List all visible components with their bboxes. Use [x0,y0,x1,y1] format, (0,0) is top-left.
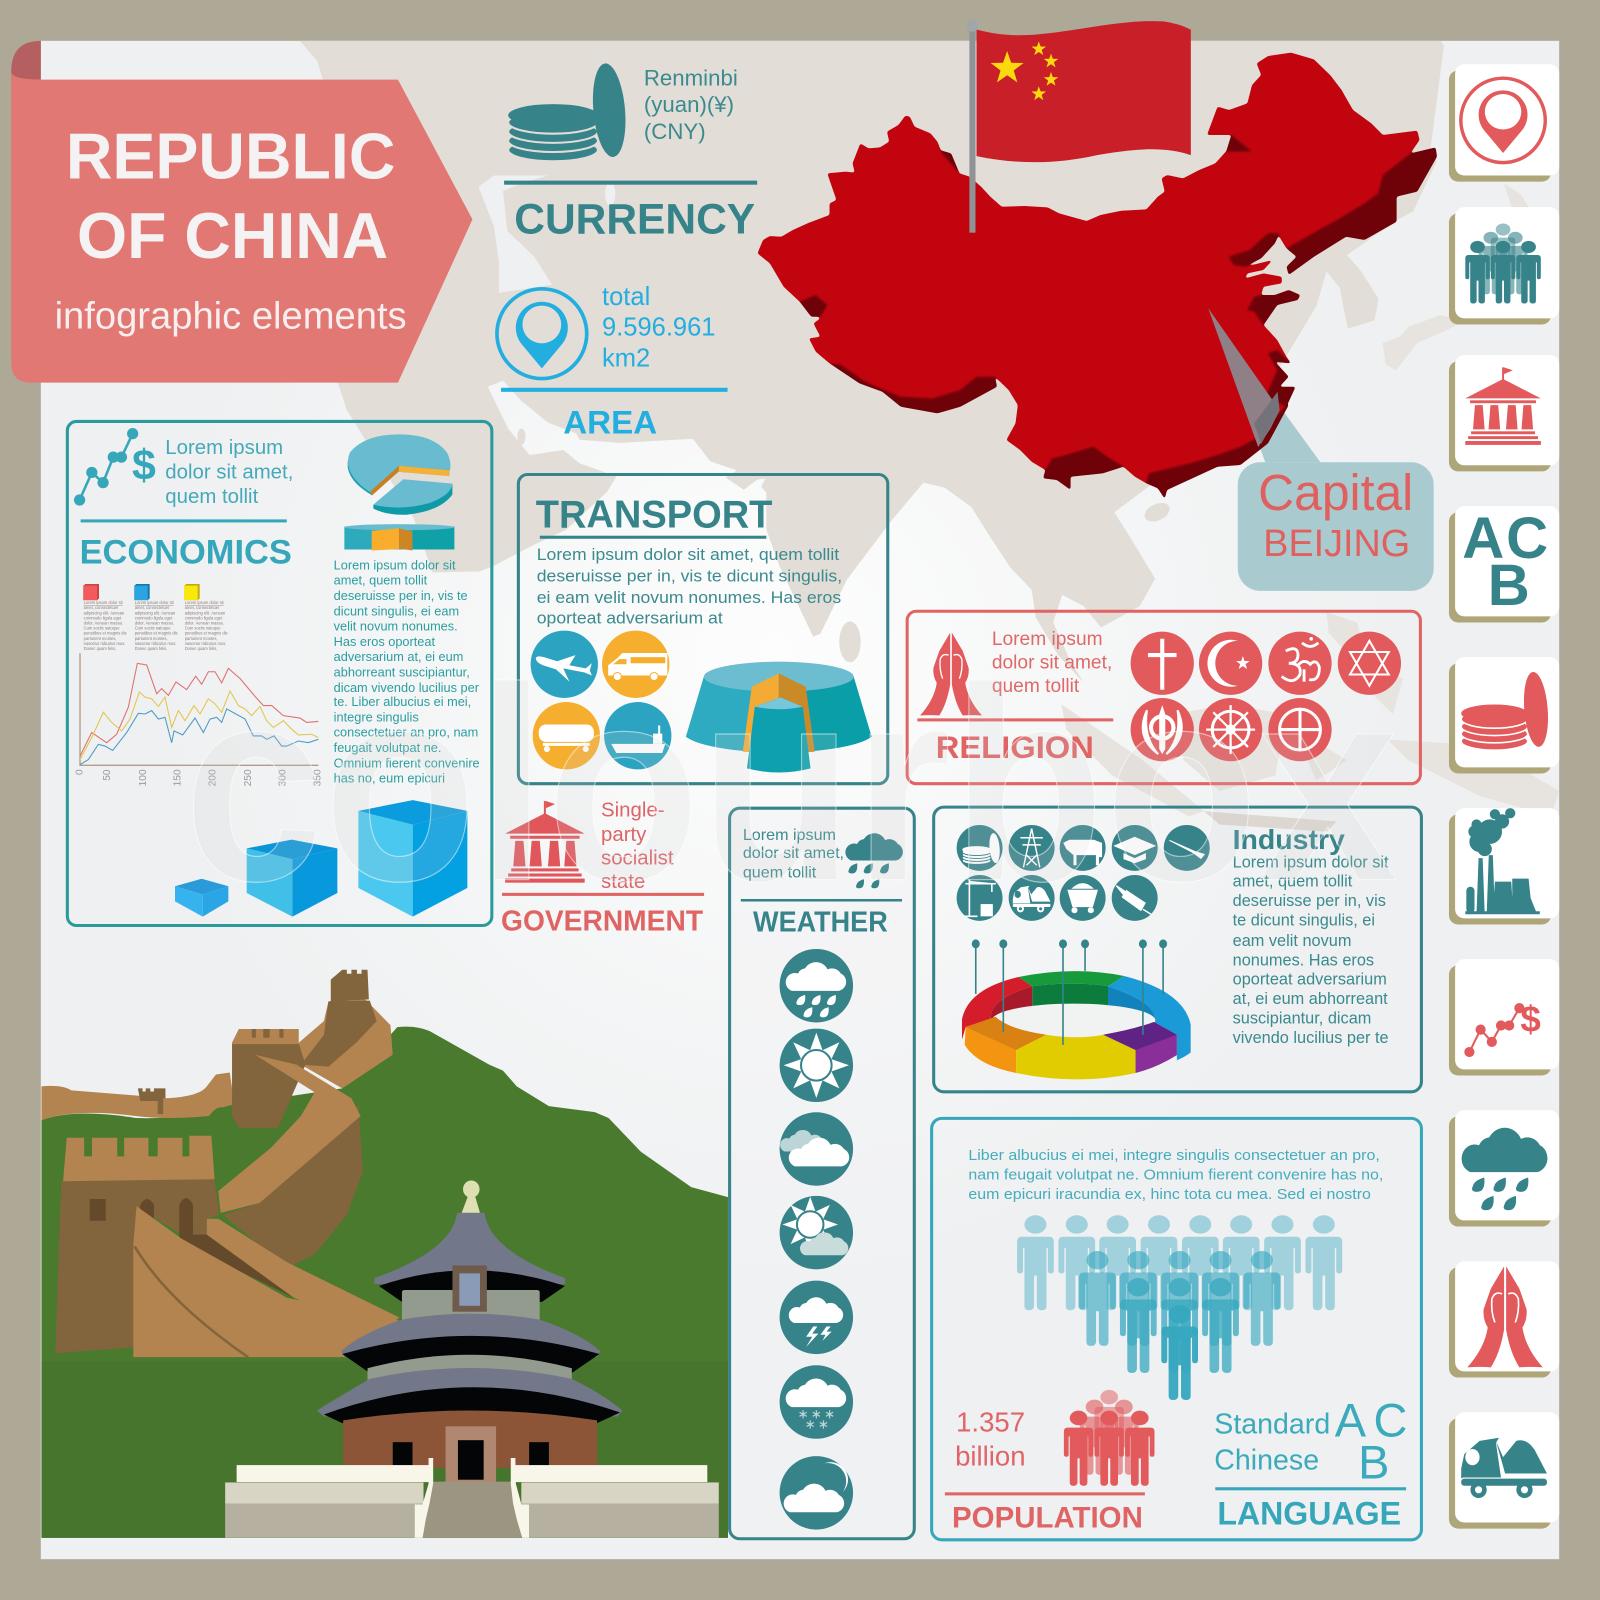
industry paragraph: deseruisse per in, vis [1233,892,1386,910]
sidebar icon tiles [1449,64,1559,1529]
language letters: B [1358,1437,1389,1489]
currency text: (yuan)(¥) [644,92,734,117]
panel: weather [730,808,914,1539]
flag stars [991,41,1058,100]
map of China [757,53,1437,499]
icon: thunderstorm [780,1281,853,1354]
industry paragraph: Lorem ipsum dolor sit [1233,853,1389,871]
panel: economics [67,421,492,926]
tile: religion [1449,1261,1559,1378]
people chart [1017,1215,1342,1400]
icon: night cloud [780,1456,853,1530]
icon: om [1268,632,1332,695]
icon: graduation cap [1112,825,1158,871]
tile: weather [1449,1110,1559,1227]
legend captions: penatibus et magnis dis [135,631,178,636]
population figure: billion [955,1440,1026,1471]
icon: coins [508,62,629,161]
economics paragraph: Lorem ipsum dolor sit [334,557,456,572]
mid tower [232,1029,306,1128]
icon: location pin [497,289,587,379]
inland seas [479,176,615,293]
far wall [41,1073,234,1120]
economics paragraph: abhorreant suscipiantur, [334,665,470,680]
weather intro text: quem tollit [743,864,817,882]
tile: government [1449,355,1559,471]
economics paragraph: has no, eum epicuri [334,771,445,786]
watermark: colourbox [184,632,1400,939]
legend captions: adipiscing elit. Aenean [84,610,124,615]
economics paragraph: dicunt singulis, ei eam [334,603,459,618]
icon: ship [604,702,671,769]
industry paragraph: te dicunt singulis, ei [1233,912,1375,930]
top tower [331,970,369,1011]
legend captions: dolor. Aenean massa. [185,620,224,625]
weather intro text: dolor sit amet, [743,844,844,862]
economics paragraph: amet, quem tollit [334,573,428,588]
icon: coins [957,825,1003,871]
tile: population [1449,207,1559,324]
legend captions: amet, consectetuer [185,605,220,610]
legend captions: parturient montes, [84,636,117,641]
flag pole [969,24,976,233]
currency heading: CURRENCY [514,196,755,244]
legend captions: parturient montes, [185,636,218,641]
legend captions: Lorem ipsum dolor sit [84,600,124,605]
transport paragraph: deseruisse per in, vis te dicunt singulis, [537,566,842,586]
industry paragraph: suscipiantur, dicam [1233,1009,1371,1027]
transport heading: TRANSPORT [536,494,773,537]
government text: Single- [601,799,665,821]
ring chart [962,940,1191,1079]
industry heading: Industry [1233,824,1346,855]
chart axis labels [75,769,323,786]
industry paragraph: nonumes. Has eros [1233,951,1374,969]
icon: rain cloud [845,833,903,888]
area block [497,283,728,441]
title: REPUBLIC [66,120,395,193]
title banner [11,41,472,383]
banner fold [11,41,41,80]
legend captions: Donec quam felis, [185,646,217,651]
legend captions: amet, consectetuer [135,605,170,610]
callout box [1238,462,1434,591]
industry paragraph: amet, quem tollit [1233,873,1353,891]
economics paragraph: Omnium fierent convenire [334,755,480,770]
capital name: BEIJING [1263,522,1410,564]
tile: economics: $ [1520,999,1541,1040]
economics heading: ECONOMICS [80,533,292,571]
pie chart [348,434,452,515]
currency text: (CNY) [644,119,706,144]
government text: socialist [601,847,674,869]
legend captions: parturient montes, [135,636,168,641]
legend captions: Cum sociis natoque [135,626,171,631]
industry paragraph: eam velit novum [1233,932,1351,950]
weather heading: WEATHER [753,907,888,939]
population paragraph: nam feugait volutpat ne. Omnium fierent convenire has no, [968,1167,1383,1183]
legend captions [84,600,228,651]
legend captions: commodo ligula eget [84,615,122,620]
icon: people group [1064,1390,1154,1486]
economics paragraph: consectetuer an pro, nam [334,725,478,740]
transport paragraph: Lorem ipsum dolor sit amet, quem tollit [537,545,839,564]
legend captions: Cum sociis natoque [84,626,120,631]
religion text: quem tollit [992,676,1080,697]
legend [83,584,200,600]
currency text: Renminbi [644,66,738,91]
chart axis labels: 50 [102,769,113,781]
tile: location [1449,64,1559,182]
language heading: LANGUAGE [1217,1494,1401,1531]
hills [41,1027,728,1538]
economics intro text: Lorem ipsum [165,437,283,459]
industry paragraph: at, ei eum abhorreant [1233,990,1388,1008]
panel: transport [518,474,888,784]
icon: government building [505,801,585,883]
language text: Chinese [1214,1444,1319,1476]
industry paragraph: vivendo lucilius per te [1233,1029,1389,1047]
government text: party [601,824,647,846]
icon: plane [531,631,598,698]
tile: language: B [1488,553,1530,618]
language letters: A [1335,1395,1367,1447]
tile: language: C [1506,506,1548,571]
economics paragraph: dicam vivendo lucilius per [334,680,480,695]
legend captions: penatibus et magnis dis [84,631,127,636]
icon: dump truck [1009,875,1055,921]
capital callout [1238,462,1434,591]
icon: cross [1131,632,1194,695]
economics intro text: quem tollit [165,486,259,508]
economics intro text: dolor sit amet, [165,462,293,484]
language text: Standard [1214,1409,1330,1441]
icon: growth chart: $ [132,442,156,490]
economics paragraph: feugait volutpat ne. [334,740,441,755]
chart axis labels: 0 [75,769,86,775]
tile: economics [1449,959,1559,1076]
icon: cow [1060,825,1106,871]
banner body [11,71,472,383]
icon: crescent and star [1199,632,1262,695]
callout pointer [1208,308,1320,462]
legend captions: penatibus et magnis dis [185,631,228,636]
legend captions: Lorem ipsum dolor sit [135,600,175,605]
chart axis labels: 250 [243,769,254,786]
economics paragraph: Has eros oporteat [334,634,435,649]
icon: sun cross [1268,698,1332,761]
winding wall [223,1104,363,1268]
icon: tanker wagon [533,702,600,769]
icon: clouds [780,1112,853,1186]
tile: language: A [1462,506,1504,571]
tile: industry [1449,808,1559,924]
weather intro text: Lorem ipsum [743,826,836,844]
economics paragraph: te. Liber albucius ei mei, [334,694,471,709]
chart axis labels: 200 [207,769,218,786]
area heading: AREA [563,404,657,441]
currency block [504,62,757,244]
chart axis labels: 300 [278,769,289,786]
bar cubes [175,800,467,917]
flag of China [966,19,1191,233]
mid wall climbing the hill [299,999,393,1088]
transport paragraph: ei eam velit novum nonumes. Has eros [537,587,841,607]
economics paragraph: deseruisse per in, vis te [334,588,468,603]
icon: star of David [1338,632,1401,695]
population heading: POPULATION [952,1502,1143,1535]
pointer over map [1208,308,1280,447]
line chart [80,653,318,765]
icon: sun [780,1029,853,1102]
government text: state [601,871,645,893]
economics paragraph: velit novum nonumes. [334,619,458,634]
legend captions: nascetur ridiculus mus. [84,641,125,646]
chart axis labels: 350 [312,769,323,786]
temple [225,1180,719,1538]
area text: km2 [602,344,650,372]
panel: religion [907,611,1420,784]
tile: transport [1449,1412,1559,1529]
icon: rifle [1164,825,1210,871]
legend captions: Lorem ipsum dolor sit [185,600,225,605]
tile: language [1449,506,1559,622]
language letters: C [1373,1395,1407,1447]
legend captions: Donec quam felis, [84,646,116,651]
subtitle: infographic elements [55,295,407,337]
illustration: Great Wall and Temple of Heaven [41,970,728,1538]
legend captions: adipiscing elit. Aenean [185,610,225,615]
chart axis labels: 100 [138,769,149,786]
population figure: 1.357 [956,1407,1025,1438]
area text: 9.596.961 [602,314,715,342]
title line two: OF CHINA [77,199,388,272]
panel: population and language [932,1118,1421,1540]
far tower [138,1088,165,1114]
legend captions: nascetur ridiculus mus. [185,641,226,646]
3D cone chart [686,662,872,773]
legend captions: Cum sociis natoque [185,626,221,631]
religion text: dolor sit amet, [992,652,1112,673]
icon: praying hands [920,633,982,715]
icon: growth chart [74,428,156,506]
legend captions: amet, consectetuer [84,605,119,610]
industry paragraph: oporteat adversarium [1233,971,1387,989]
population paragraph: eum epicuri iracundia ex, hinc tota cu mea. Sed ei nostro [968,1186,1371,1203]
legend captions: commodo ligula eget [135,615,173,620]
icon: khanda [1131,698,1194,761]
population paragraph: Liber albucius ei mei, integre singulis consectetuer an pro, [968,1148,1380,1164]
icon: crane [957,875,1003,921]
government block [501,799,704,938]
religion heading: RELIGION [936,729,1094,765]
big tower [55,1179,219,1353]
icon: snow [780,1365,853,1439]
legend captions: commodo ligula eget [185,615,223,620]
area text: total [602,283,650,311]
economics paragraph: adversarium at, ei eum [334,649,463,664]
icon: sun behind cloud [780,1196,853,1269]
legend captions: dolor. Aenean massa. [84,620,123,625]
background world map [300,41,1559,832]
chart axis labels: 150 [173,769,184,786]
legend captions: nascetur ridiculus mus. [135,641,176,646]
flag cloth [977,21,1191,162]
icon: syringe [1112,875,1158,921]
tile: currency [1449,657,1559,773]
panel: industry [934,807,1421,1092]
religion text: Lorem ipsum [992,629,1103,650]
pie chart side view [344,524,454,551]
legend captions: adipiscing elit. Aenean [135,610,175,615]
icon: mine cart [1060,875,1106,921]
economics paragraph: integre singulis [334,709,419,724]
transport paragraph: oporteat adversarium at [537,608,723,627]
capital label: Capital [1258,464,1413,521]
icon: bus [602,631,669,698]
front wall [182,1235,294,1298]
icon: dharma wheel [1199,698,1262,761]
icon: pylon [1009,825,1055,871]
legend captions: Donec quam felis, [135,646,167,651]
legend captions: dolor. Aenean massa. [135,620,174,625]
icon: rain [780,949,853,1022]
government heading: GOVERNMENT [501,906,704,938]
